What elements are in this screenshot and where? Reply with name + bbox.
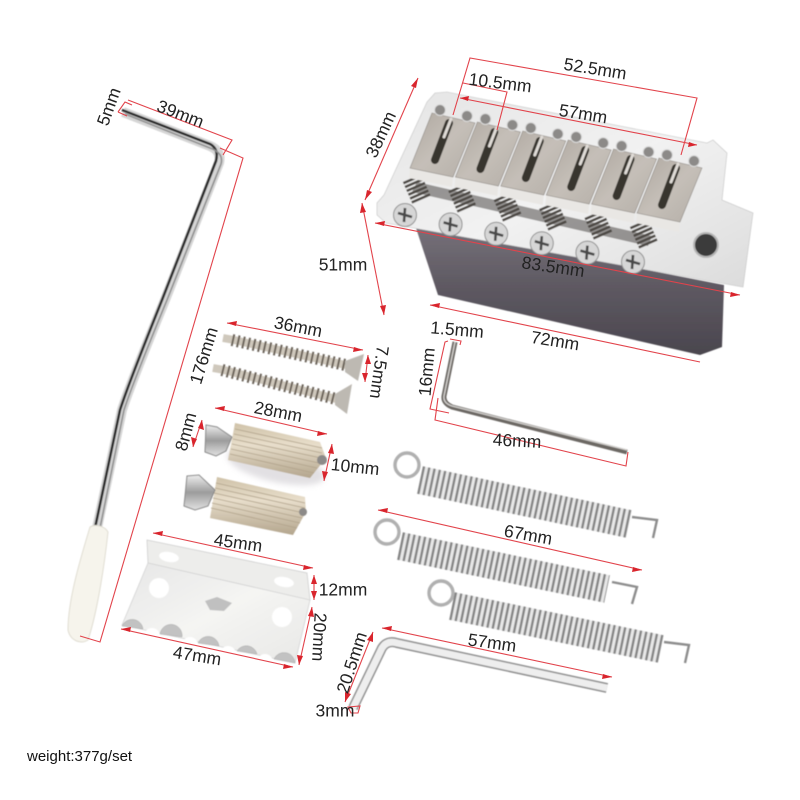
label: 72mm: 72mm (530, 327, 581, 354)
dimension: 67mm (378, 508, 642, 572)
dimension: 10.5mm (463, 83, 507, 130)
dimension: 38mm (365, 78, 418, 200)
label: upper 57mm: 57mm (558, 100, 609, 127)
spring two (375, 520, 637, 604)
dimension: 1.5mm, 16mm and 46mm (430, 339, 628, 466)
sustain block (415, 225, 724, 355)
springs (375, 453, 689, 663)
spring three (429, 581, 689, 663)
large hex key (353, 642, 607, 708)
label: 176mm: 176mm (186, 325, 222, 386)
weight note: weight:377g/set (26, 748, 133, 765)
dimension: 52.5mm (453, 58, 697, 155)
dimension: 12mm (311, 575, 317, 600)
arm hole (694, 233, 718, 257)
label: 7.5mm: 7.5mm (366, 344, 393, 400)
label: 45mm: 45mm (213, 529, 264, 556)
saddle gap (412, 182, 652, 246)
dimension: 20.5mm (345, 632, 373, 702)
arm tip (68, 526, 108, 642)
label: 20.5mm: 20.5mm (332, 629, 371, 696)
small hex key (444, 342, 627, 452)
dimension: 36mm (227, 321, 363, 352)
roller two (184, 475, 307, 535)
label: 52.5mm: 52.5mm (562, 54, 628, 83)
bridge assembly (377, 92, 753, 355)
dimension: upper 57mm (460, 96, 697, 147)
dimension lines (80, 58, 740, 713)
label: 28mm: 28mm (252, 397, 304, 426)
dimension: 45mm (153, 531, 313, 570)
roller one (205, 423, 328, 493)
dimension: 28mm (215, 406, 327, 436)
label: 83.5mm: 83.5mm (520, 252, 586, 281)
label: 20mm: 20mm (308, 612, 331, 662)
dimension: 8mm (191, 420, 204, 447)
label: 47mm: 47mm (172, 642, 223, 669)
dimension: 7.5mm (362, 355, 371, 382)
dimension: 72mm (430, 303, 700, 362)
label: 46mm: 46mm (492, 429, 542, 452)
label: 5mm: 5mm (93, 85, 125, 128)
dimension: arm 176mm (80, 148, 243, 642)
spring one (395, 453, 657, 538)
dimension: 10mm (322, 444, 334, 481)
tremolo arm (68, 110, 222, 642)
dimension: 47mm (121, 627, 293, 669)
label: 3mm: 3mm (316, 701, 354, 721)
screws (213, 338, 364, 414)
dimension: 20mm (297, 607, 314, 665)
screw one (223, 338, 364, 381)
dimension: arm 5mm and 39mm (118, 100, 232, 155)
spring claw plate (122, 540, 310, 670)
label: 10.5mm: 10.5mm (468, 69, 533, 96)
saddles (409, 104, 702, 246)
label: 10mm: 10mm (330, 454, 380, 479)
dimension: lower 57mm (382, 626, 612, 679)
label: 36mm: 36mm (272, 312, 324, 341)
bridge plate (377, 92, 753, 287)
label: 51mm: 51mm (319, 255, 367, 275)
label: 38mm: 38mm (361, 108, 400, 161)
dimension: 51mm (360, 203, 386, 315)
screw two (213, 368, 352, 414)
label: 1.5mm: 1.5mm (430, 317, 485, 342)
knurled rollers (184, 423, 328, 535)
label: 16mm: 16mm (415, 347, 439, 397)
label: lower 57mm: 57mm (467, 629, 518, 656)
measurement labels (93, 54, 628, 721)
dimension: 83.5mm (375, 221, 740, 297)
label: 67mm: 67mm (503, 521, 554, 549)
label: 8mm: 8mm (171, 410, 200, 453)
label: 39mm: 39mm (154, 96, 207, 132)
label: 12mm: 12mm (319, 580, 367, 600)
front screws (394, 204, 644, 274)
dimension: 3mm (348, 706, 360, 713)
